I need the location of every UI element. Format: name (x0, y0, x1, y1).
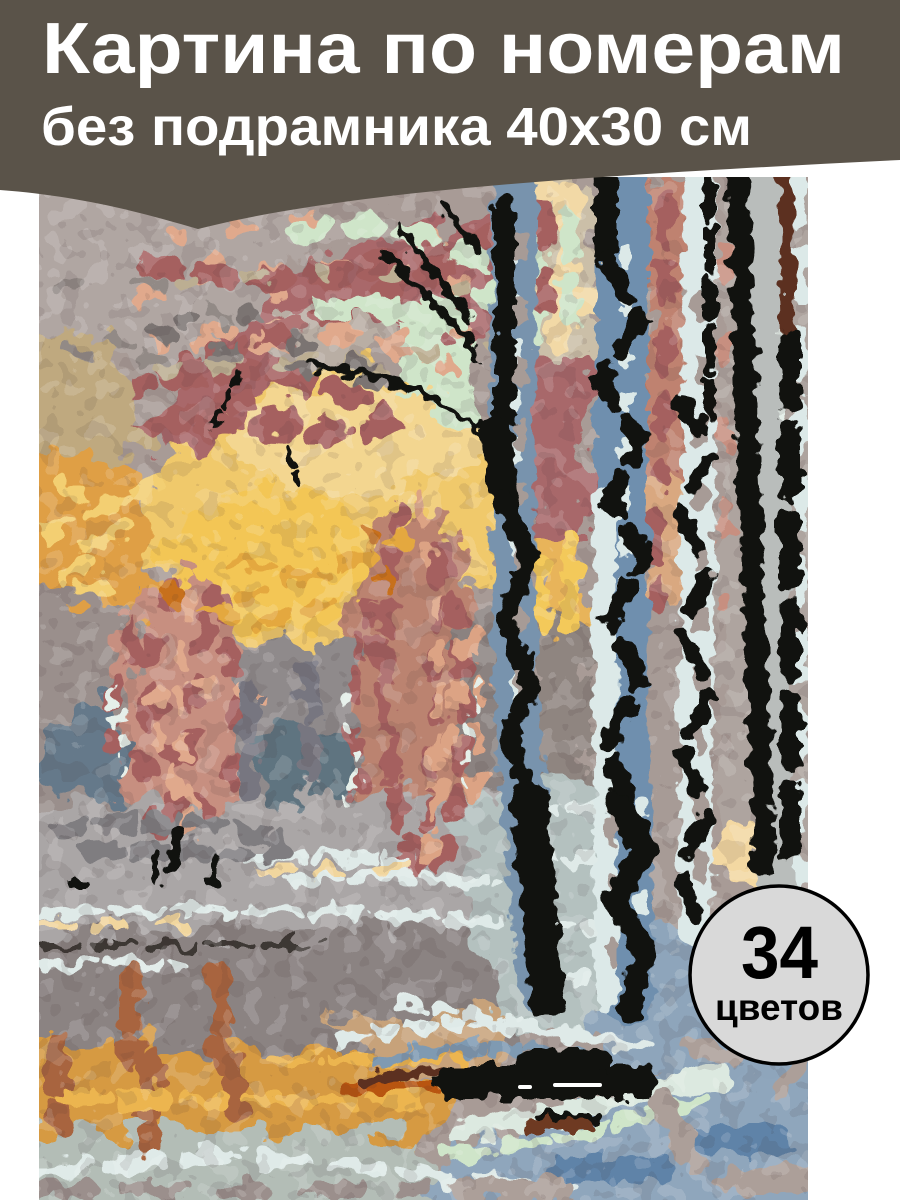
painting background colour masses (39, 177, 808, 1200)
badge: 34 colours (690, 886, 868, 1064)
white highlights on log (520, 1085, 600, 1087)
badge: 34 colours: цветов (715, 987, 843, 1028)
paint-by-number texture overlay: light patches (39, 177, 808, 1200)
painting: autumn birches by a river (39, 177, 808, 1200)
paint-by-number texture overlay: dark patches (39, 177, 808, 1200)
foreground dark log on snow (365, 1060, 645, 1125)
birch branches (70, 205, 495, 885)
subtitle: без подрамника 40x30 см (41, 97, 752, 157)
header banner (0, 0, 900, 229)
painting mottled paint patches (40, 190, 810, 1190)
title: Картина по номерам (42, 9, 845, 89)
badge: 34 colours: 34 (741, 911, 818, 994)
birch trunks (496, 180, 800, 1010)
